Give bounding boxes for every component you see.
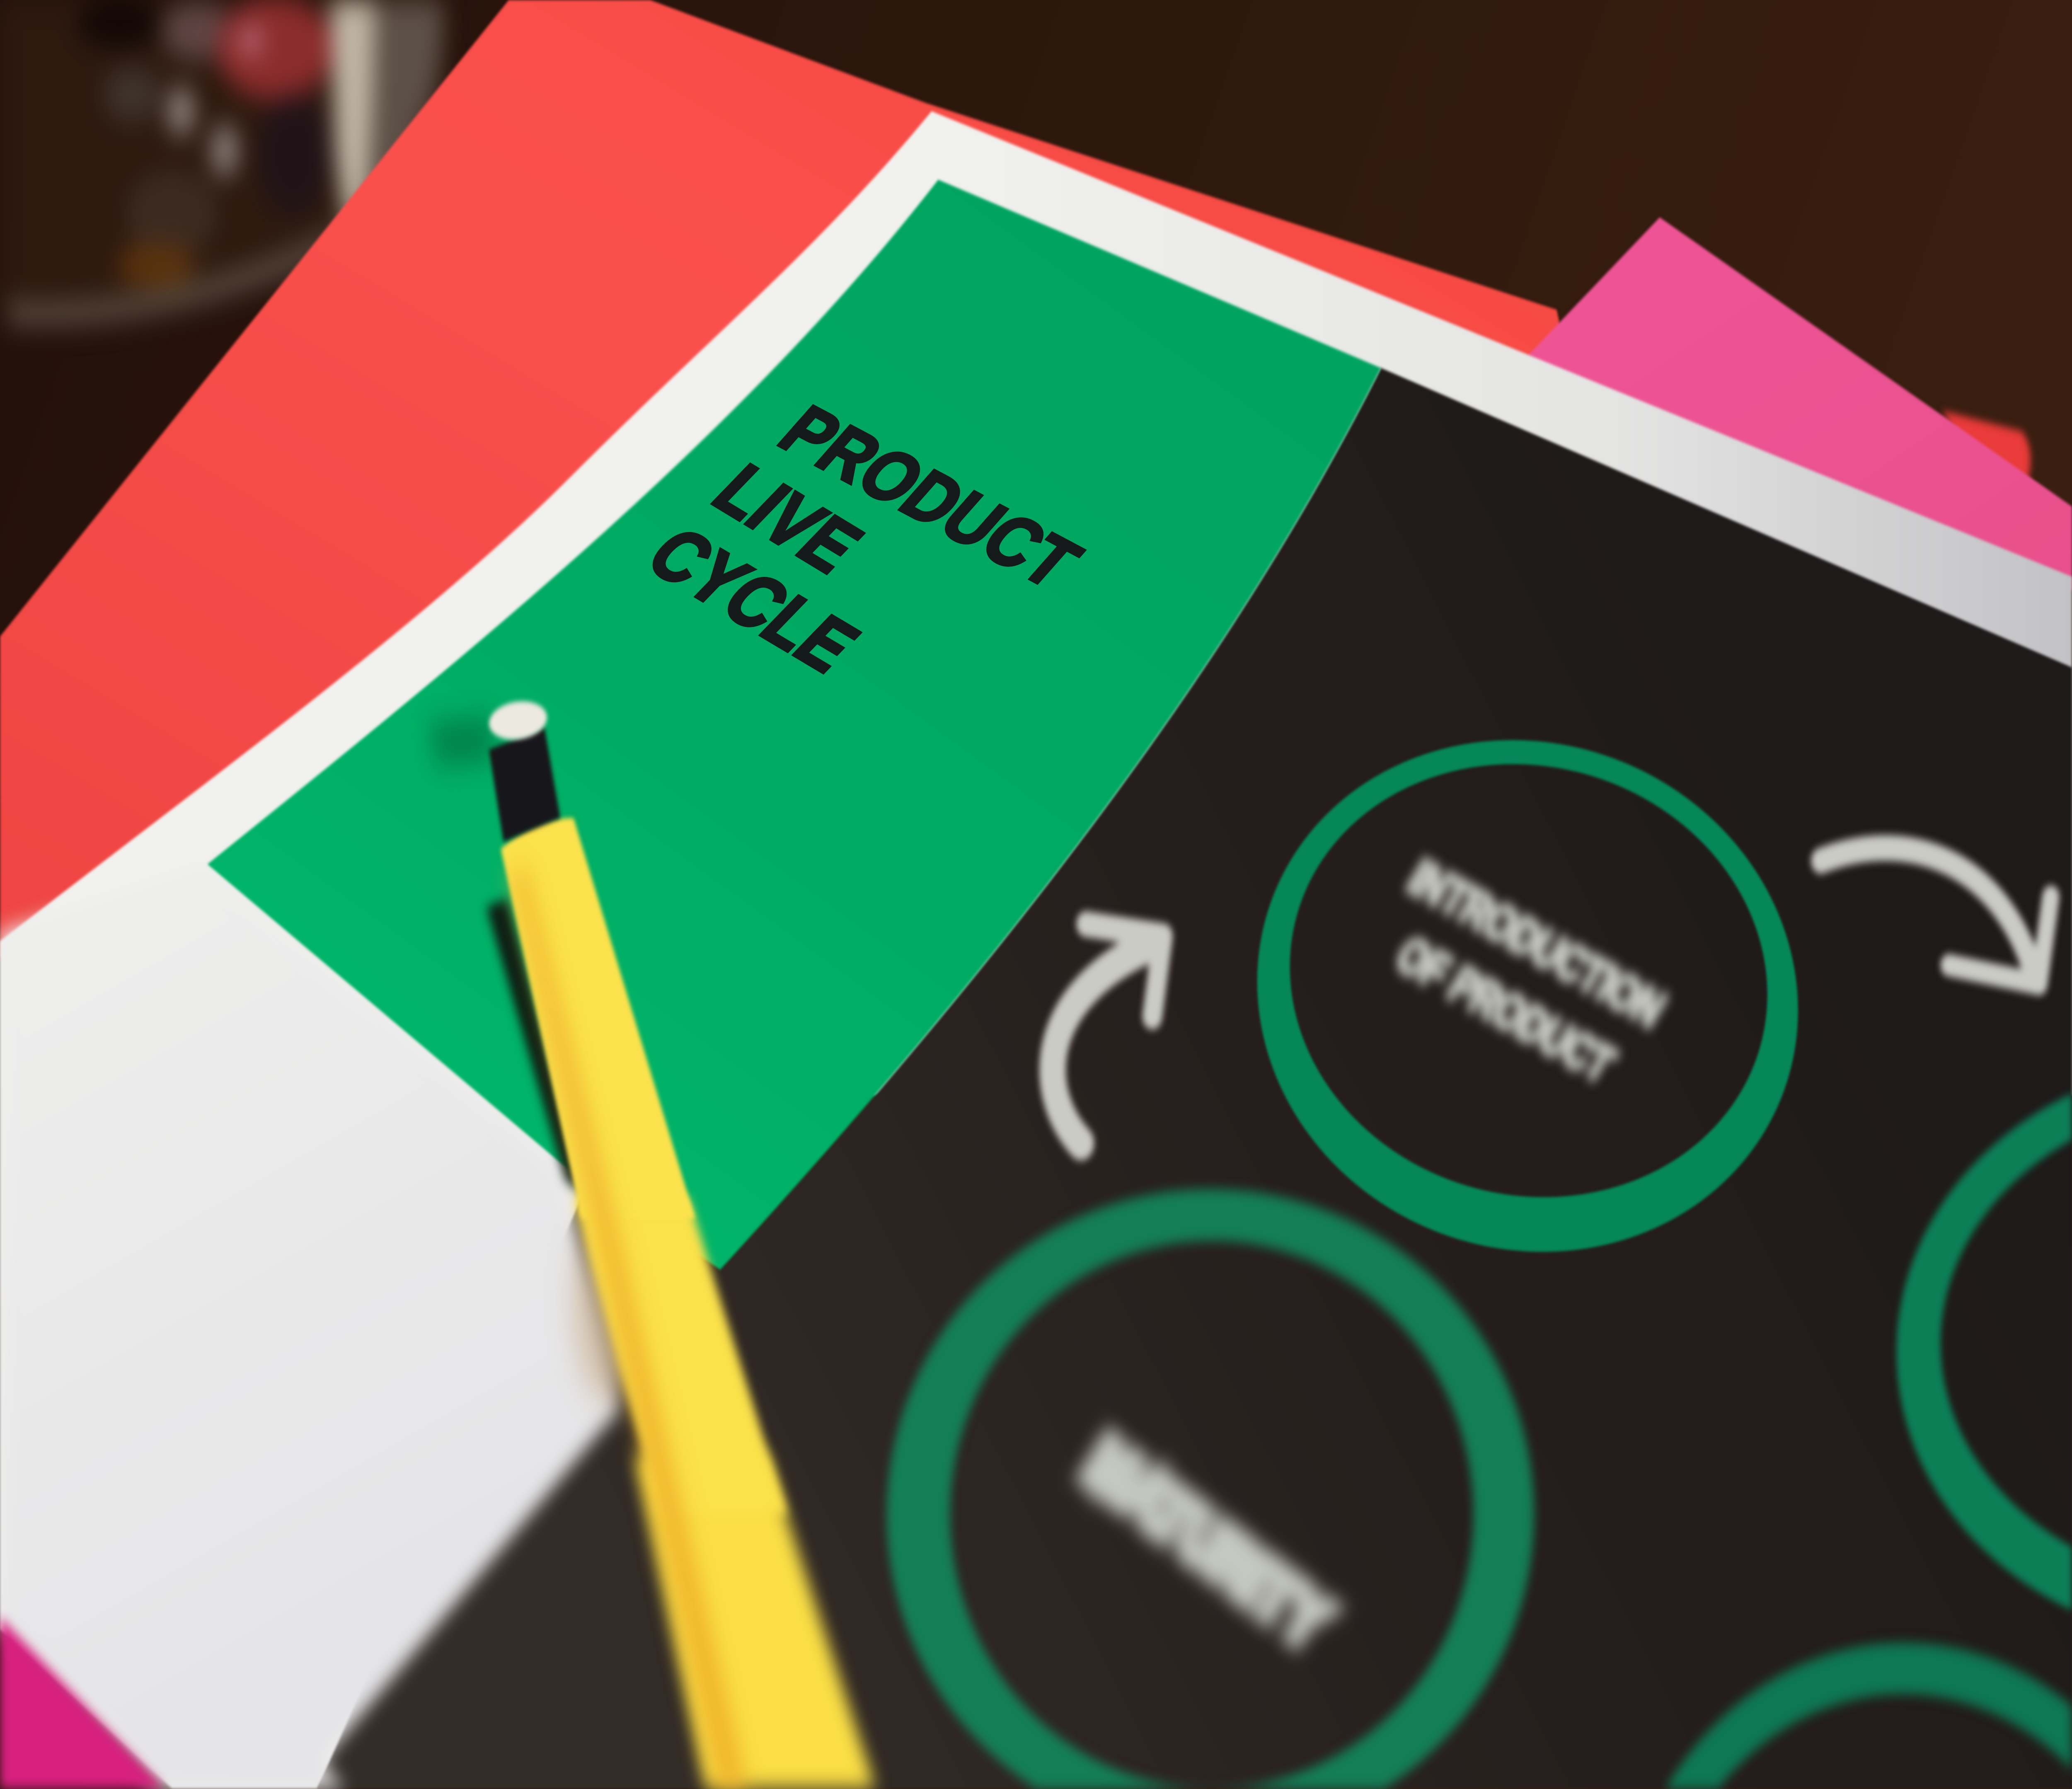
ferrule [489, 727, 560, 842]
pencil shadow on paper [486, 898, 588, 1198]
ring label: MATURITY [1073, 1422, 1341, 1662]
ring label: INTRODUCTION [1399, 849, 1675, 1037]
pencil shaded left side [513, 864, 747, 1789]
ring: right stage [1896, 1094, 2072, 1610]
pink sheet [1527, 217, 2072, 591]
warm reflection on white page beside pencil [574, 1198, 647, 1403]
pencil bottom section [634, 1455, 876, 1789]
ring: bottom right stage [1665, 1643, 2072, 1789]
title: PRODUCT LIVE CYCLE: PRODUCT [763, 392, 1096, 603]
arrow: curved down-right [1821, 848, 2051, 984]
blurred white page area [0, 864, 618, 1789]
pencil [429, 698, 876, 1789]
drinking glass, top left [0, 0, 443, 317]
ring: introduction of product [1241, 712, 1815, 1281]
green title panel [208, 180, 1381, 1270]
black panel [317, 368, 2072, 1789]
title: PRODUCT LIVE CYCLE [630, 392, 1096, 687]
eraser tip [488, 698, 548, 743]
red folder corner behind pink sheet [1943, 411, 2031, 488]
arrow: curved up-right [1053, 924, 1163, 1143]
ring: lower stage [887, 1189, 1534, 1789]
red folder [0, 0, 1586, 959]
title: PRODUCT LIVE CYCLE: LIVE [696, 450, 879, 587]
pencil middle section [574, 1198, 788, 1515]
title: PRODUCT LIVE CYCLE: CYCLE [630, 513, 876, 687]
magenta sheet, bottom left [0, 1617, 165, 1789]
ring label: OF PRODUCT [1387, 926, 1624, 1092]
pencil top section [501, 818, 695, 1218]
pencil cast shadow near ferrule [429, 715, 494, 767]
